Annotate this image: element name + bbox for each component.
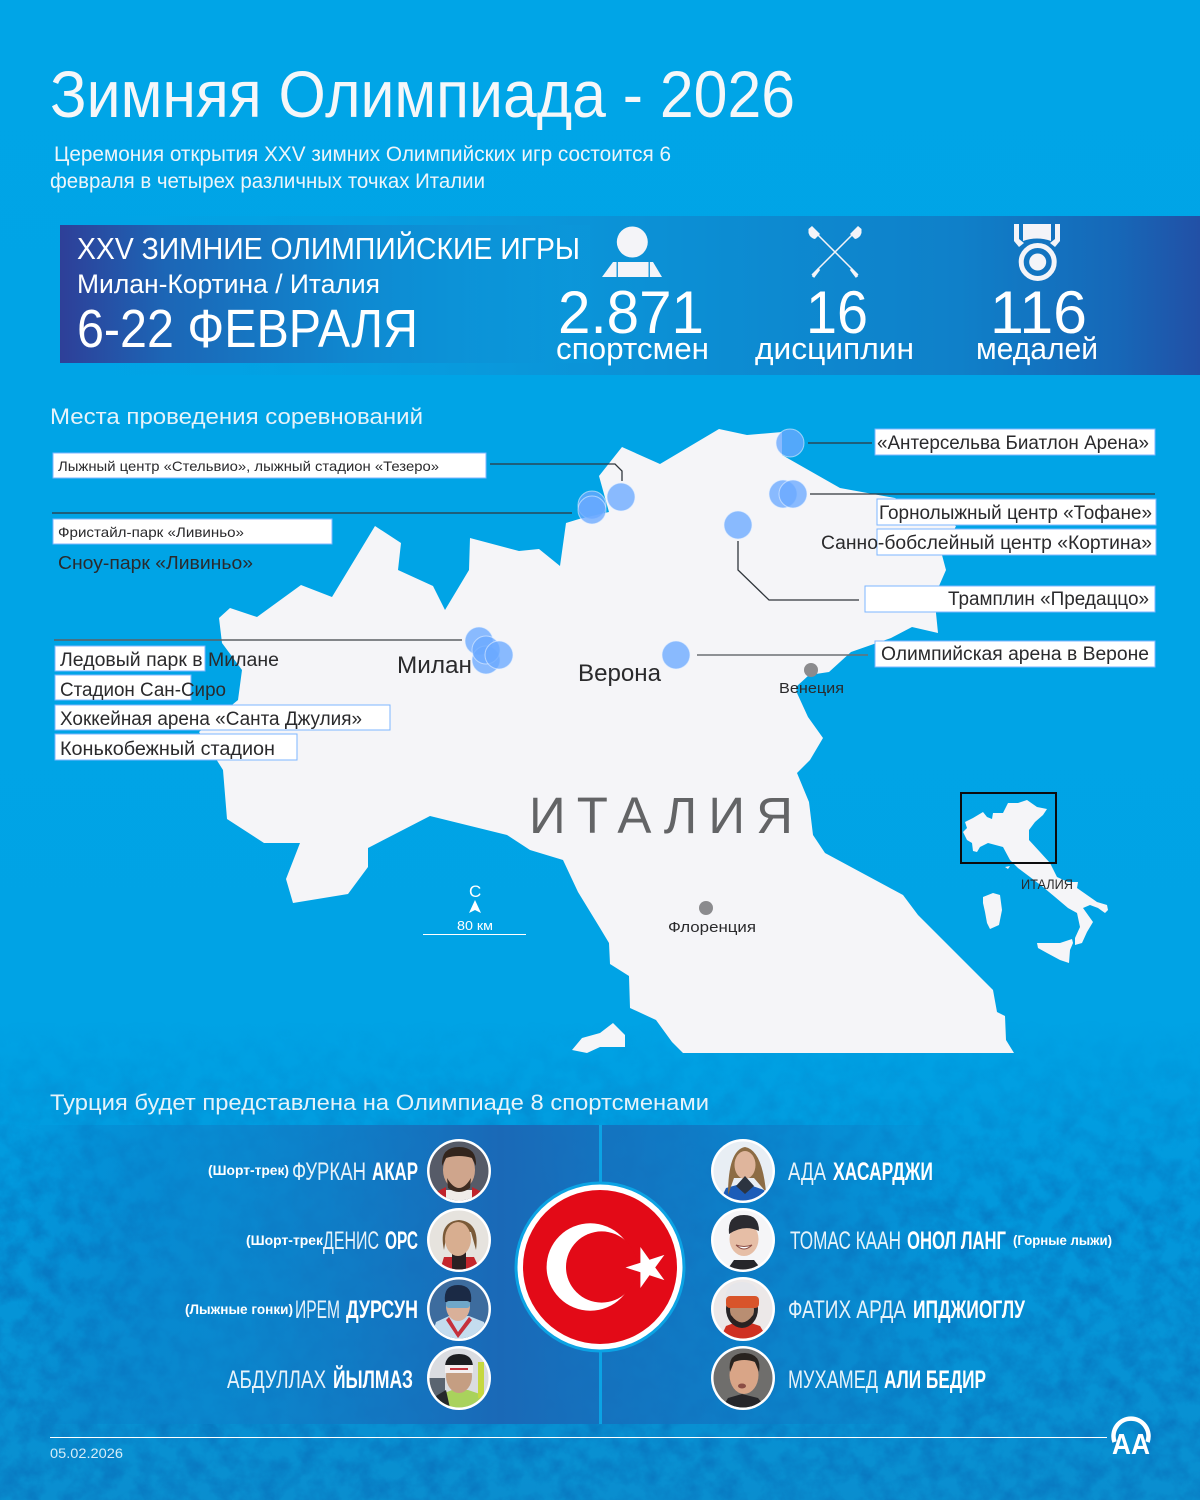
name	[788, 1296, 1025, 1324]
stat: disciplines: 16	[806, 279, 868, 346]
icon: Turkish flag	[514, 1182, 686, 1352]
inset map: Italy locator: ИТАЛИЯ	[1021, 876, 1073, 892]
label: Livigno freestyle park: Фристайл-парк «Ливиньо»	[58, 524, 244, 540]
map: northern Italy	[199, 429, 1014, 1053]
portrait	[427, 1346, 491, 1410]
city: Milan: Милан	[397, 652, 472, 679]
name	[790, 1227, 1112, 1255]
name: ИПДЖИОГЛУ	[913, 1296, 1025, 1324]
portrait	[427, 1139, 491, 1203]
city: Florence: Флоренция	[668, 919, 756, 936]
stat: disciplines: дисциплин	[755, 331, 914, 366]
name: ДУРСУН	[346, 1296, 418, 1324]
scale and north arrow: 80 км	[457, 918, 493, 933]
name: (Горные лыжи)	[1013, 1232, 1112, 1248]
label: Antholz: «Антерсельва Биатлон Арена»	[877, 433, 1149, 454]
label: speed skating: Конькобежный стадион	[60, 739, 275, 760]
connector lines	[52, 443, 1155, 655]
scale and north arrow: С	[469, 882, 481, 901]
name: ФУРКАН	[292, 1158, 366, 1186]
name: ФАТИХ АРДА	[788, 1296, 906, 1324]
name	[185, 1296, 418, 1324]
name: АЛИ БЕДИР	[884, 1366, 986, 1394]
athlete: Abdullah Yilmaz	[227, 1346, 491, 1410]
name: ТОМАС КААН	[790, 1227, 901, 1255]
name: АБДУЛЛАХ	[227, 1366, 326, 1394]
name: (Шорт-трек	[246, 1232, 324, 1248]
name: АДА	[788, 1158, 826, 1186]
city: Florence	[668, 901, 756, 936]
athlete: Irem Dursun	[185, 1277, 491, 1341]
panel: Turkish athletes	[20, 1125, 980, 1424]
icon: athlete	[602, 226, 662, 277]
name	[788, 1158, 933, 1186]
subtitle: февраля в четырех различных точках Италии	[50, 170, 485, 193]
heading: Turkey team: Турция будет представлена на Олимпиаде 8 спортсменами	[50, 1090, 709, 1115]
name: МУХАМЕД	[788, 1366, 878, 1394]
label: Tofane: Горнолыжный центр «Тофане»	[879, 503, 1152, 524]
name	[227, 1364, 413, 1394]
panel: games info: XXV ЗИМНИЕ ОЛИМПИЙСКИЕ ИГРЫ	[77, 230, 580, 266]
footer rule and date: 05.02.2026	[50, 1445, 123, 1461]
stat: athletes: спортсмен	[556, 331, 709, 366]
portrait	[711, 1208, 775, 1272]
icon: AA logo: AA	[1112, 1429, 1150, 1461]
panel: games info: Милан-Кортина / Италия	[77, 269, 380, 299]
title: Зимняя Олимпиада - 2026	[50, 57, 795, 131]
subtitle: Церемония открытия XXV зимних Олимпийских игр состоится 6	[54, 143, 671, 166]
athlete: Tomas Kaan Onol Lang	[711, 1208, 1112, 1272]
label: Livigno snow park: Сноу-парк «Ливиньо»	[58, 553, 253, 573]
heading: venues: Места проведения соревнований	[50, 404, 423, 429]
name: ОРС	[385, 1227, 418, 1255]
name	[788, 1366, 986, 1394]
portrait	[427, 1208, 491, 1272]
stat: medals	[976, 279, 1098, 366]
icon: crossed ski poles	[808, 226, 862, 277]
label: Milan ice park: Ледовый парк в Милане	[60, 650, 279, 671]
name: ИРЕМ	[295, 1296, 340, 1324]
name: АКАР	[372, 1158, 418, 1186]
portrait	[427, 1277, 491, 1341]
icon: medal	[1014, 224, 1060, 278]
subtitle	[50, 143, 671, 193]
inset map: Italy locator	[961, 793, 1108, 963]
name: ОНОЛ ЛАНГ	[907, 1227, 1006, 1255]
athlete: Fatih Arda Ipdzhioglu	[711, 1277, 1025, 1341]
stat: medals: медалей	[976, 331, 1098, 366]
label: Santa Giulia: Хоккейная арена «Санта Джулия»	[60, 709, 362, 730]
panel: key facts band	[0, 216, 1200, 375]
city: Verona: Верона	[578, 660, 662, 687]
name	[208, 1158, 418, 1186]
name: ДЕНИС	[323, 1227, 379, 1255]
name: ЙЫЛМАЗ	[333, 1364, 413, 1394]
portrait	[711, 1139, 775, 1203]
city: Venice: Венеция	[779, 680, 844, 697]
stat: medals: 116	[990, 279, 1087, 346]
name	[246, 1227, 418, 1255]
label: Predazzo: Трамплин «Предаццо»	[948, 589, 1149, 610]
scale and north arrow	[423, 882, 526, 935]
athlete: Mukhamed Ali Bedir	[711, 1346, 986, 1410]
label: Predazzo	[865, 586, 1155, 612]
athlete: Ada Hasardzhi	[711, 1139, 933, 1203]
stat: athletes: 2.871	[558, 279, 704, 346]
label: Livigno freestyle park	[53, 519, 332, 544]
name: (Шорт-трек)	[208, 1162, 289, 1178]
athlete: Denis Ors	[246, 1208, 491, 1272]
label: Cortina: Санно-бобслейный центр «Кортина»	[821, 533, 1152, 554]
stat: disciplines	[755, 279, 914, 366]
panel: games info: 6-22 ФЕВРАЛЯ	[77, 299, 418, 359]
portrait	[711, 1346, 775, 1410]
portrait	[711, 1277, 775, 1341]
label: San Siro: Стадион Сан-Сиро	[60, 680, 226, 701]
label: speed skating	[55, 734, 297, 760]
athlete: Furkan Akar	[208, 1139, 491, 1203]
panel: games info	[60, 225, 590, 363]
country label: ИТАЛИЯ	[529, 787, 793, 844]
venue markers	[465, 429, 807, 674]
label: Verona arena: Олимпийская арена в Вероне	[881, 644, 1149, 665]
name: ХАСАРДЖИ	[833, 1158, 933, 1186]
name: (Лыжные гонки)	[185, 1301, 293, 1317]
city: Venice	[779, 663, 844, 697]
label: Stelvio and Tesero	[53, 453, 486, 478]
label: Stelvio and Tesero: Лыжный центр «Стельвио», лыжный стадион «Тезеро»	[58, 458, 439, 474]
